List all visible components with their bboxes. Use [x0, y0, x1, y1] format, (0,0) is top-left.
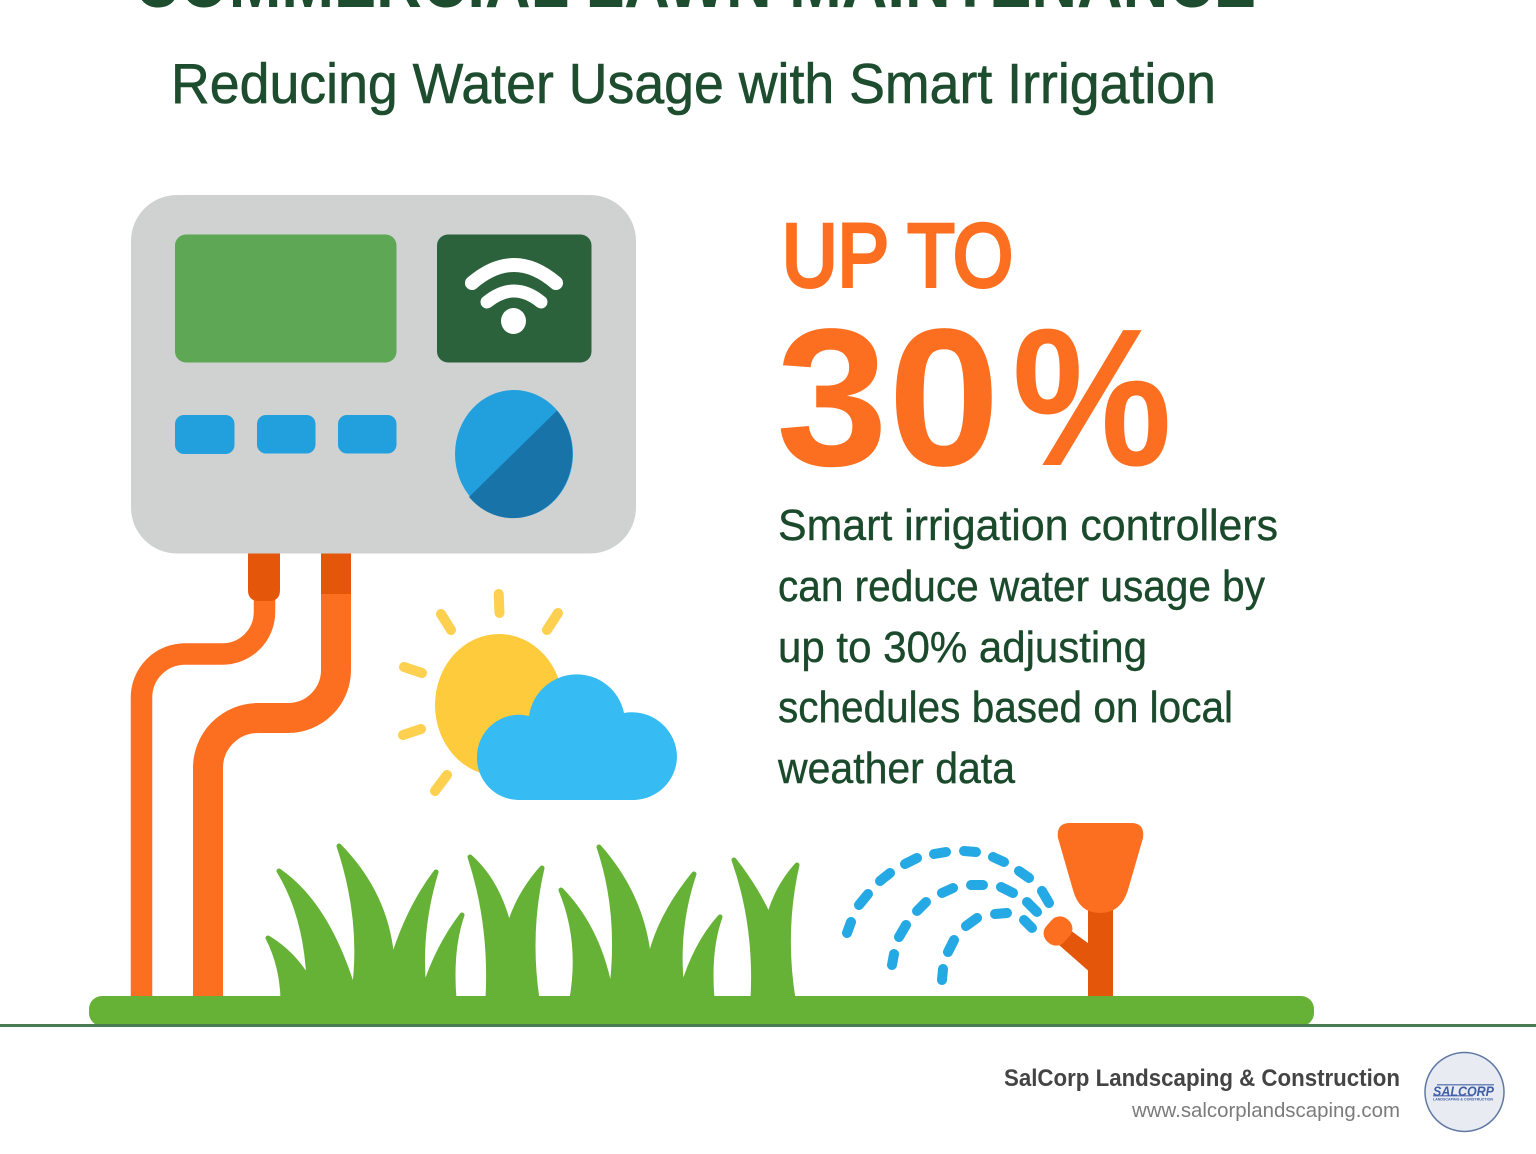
stat: 30 percent: %: [1012, 288, 1172, 507]
description text: [777, 501, 1278, 793]
sprinkler: [1039, 823, 1143, 996]
ground strip: [89, 996, 1314, 1026]
description text: weather data: [777, 744, 1015, 793]
description text: can reduce water usage by: [778, 562, 1265, 611]
smart controller: [131, 195, 636, 554]
stat: 30 percent: [776, 288, 1172, 507]
control buttons: [175, 415, 396, 454]
left pipe: [142, 553, 280, 1000]
controller screen: [175, 234, 396, 362]
right pipe: [208, 553, 351, 1000]
stat label: up to: UP TO: [782, 205, 1013, 305]
dial: [455, 390, 573, 518]
footer company name: SalCorp Landscaping & Construction: [1004, 1065, 1400, 1092]
company logo: SALCORP: [1433, 1083, 1495, 1099]
footer website: www.salcorplandscaping.com: [1131, 1099, 1400, 1122]
icon: sun: [403, 594, 563, 791]
water spray: [847, 851, 1049, 980]
description text: up to 30% adjusting: [778, 623, 1147, 672]
subtitle: Reducing Water Usage with Smart Irrigation: [171, 52, 1216, 116]
wifi panel: [437, 234, 592, 362]
grass: [268, 846, 797, 999]
stat: 30 percent: 30: [776, 288, 1000, 507]
company logo: LANDSCAPING & CONSTRUCTION: [1433, 1096, 1493, 1102]
description text: Smart irrigation controllers: [778, 501, 1278, 550]
footer divider: [0, 1024, 1536, 1027]
company logo: [1425, 1052, 1504, 1132]
icon: cloud: [477, 674, 677, 800]
description text: schedules based on local: [778, 683, 1233, 732]
